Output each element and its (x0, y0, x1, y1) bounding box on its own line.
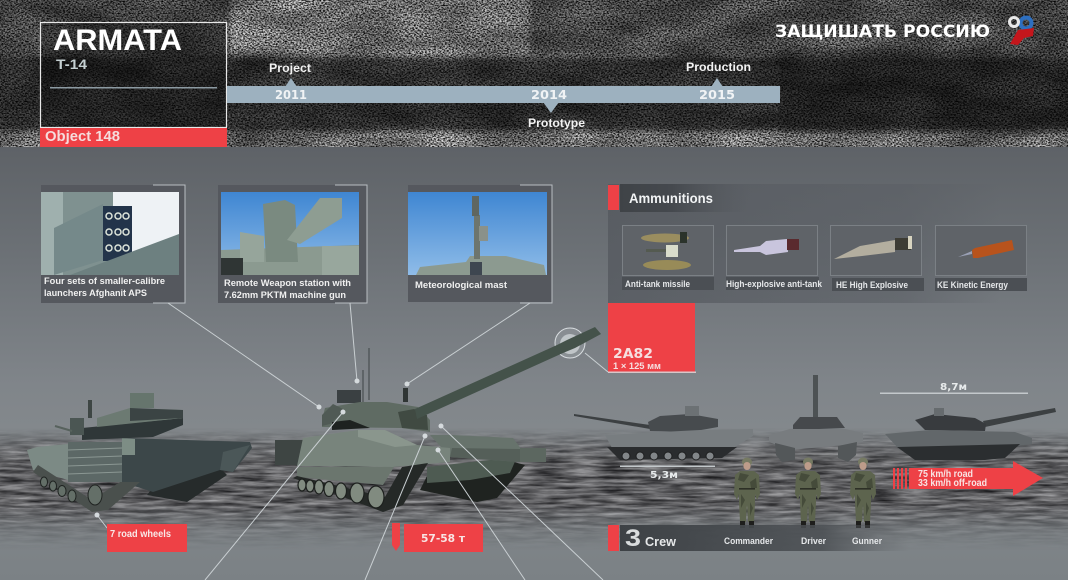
subtitle: T-14: T-14 (56, 56, 87, 72)
lower front hull (427, 457, 517, 483)
arrow: speed (893, 461, 1043, 496)
slat armour rear (275, 440, 303, 465)
heading (608, 184, 750, 212)
speed text (918, 469, 987, 489)
header textured band (0, 0, 1068, 147)
red label: weight (404, 524, 483, 552)
red label: 7 road wheels (107, 524, 187, 552)
panel: Meteorological mast (408, 185, 552, 303)
ammo: high-explosive anti-tank (726, 226, 823, 290)
gun barrel (415, 327, 601, 419)
milestone: Prototype 2014: 2014 (531, 87, 567, 102)
panel: Ammunitions (608, 184, 1027, 303)
red label: Object 148 (40, 128, 227, 147)
label: KE Kinetic Energy (937, 280, 1008, 290)
panel: Remote weapon station: 7.62mm PKTM machine gun (224, 290, 346, 301)
ammo: HE high explosive (830, 226, 924, 291)
caption: Meteorological mast (415, 280, 508, 291)
ammo: KE kinetic energy (935, 226, 1027, 291)
tank: left rear view (27, 393, 252, 512)
milestone: Project 2011 (269, 61, 311, 102)
label: Anti-tank missile (625, 279, 690, 289)
callout dots (94, 378, 444, 518)
RWS box (337, 390, 361, 403)
muzzle ring (555, 328, 585, 358)
tank: side view (574, 406, 753, 460)
dimension: width 5,3 m: 5,3м (650, 470, 678, 481)
panel: Afghanit APS: launchers Afghanit APS (44, 288, 147, 299)
crew role labels: Driver (801, 536, 826, 546)
rear block (520, 448, 546, 462)
photo: launchers (41, 192, 179, 275)
photo: mast (408, 192, 547, 275)
page background (0, 147, 1068, 580)
milestone: Project 2011: 2011 (275, 87, 307, 102)
crew bar: Crew (645, 534, 677, 549)
milestone: Prototype 2014: Prototype (528, 116, 585, 130)
milestone: Project 2011: Project (269, 61, 311, 75)
far side track (420, 461, 525, 502)
callout lines (97, 303, 608, 580)
crew role labels: Gunner (852, 536, 882, 546)
lower skirt (297, 467, 394, 485)
upper side skirt (297, 430, 450, 467)
crew role labels: Commander (724, 536, 773, 546)
weight arrow icon (392, 523, 400, 551)
timeline (227, 60, 780, 130)
milestone: Production 2015: Production (686, 60, 751, 74)
title: ARMATA: ARMATA (53, 24, 182, 57)
brand name: ЗАЩИШАТЬ РОССИЮ (775, 22, 990, 42)
front hull (27, 444, 68, 480)
speed text: 33 km/h off-road (918, 478, 987, 489)
turret (322, 402, 430, 432)
dimension: length 8,7 m: 8,7м (940, 382, 967, 393)
ground texture band (0, 428, 1068, 550)
milestone: Production 2015: 2015 (699, 87, 735, 102)
red label: 2A82 gun: 2А82 (613, 347, 653, 362)
label: High-explosive anti-tank (726, 279, 823, 289)
rear hull (122, 438, 252, 492)
milestone: Production 2015 (686, 60, 751, 102)
tank: main T-14 (275, 327, 601, 512)
caption: Four sets of smaller-calibre (44, 276, 165, 287)
antennas (363, 348, 369, 402)
ammo: anti-tank missile (622, 226, 714, 290)
red label: 2A82 gun (608, 303, 696, 373)
title box (40, 22, 227, 147)
crew figures (734, 458, 876, 528)
photo: weapon station (221, 192, 359, 275)
panel: Afghanit APS (41, 185, 185, 303)
milestone: Prototype 2014 (528, 87, 585, 130)
crew role labels (724, 536, 882, 546)
red label: 2A82 gun: 1 × 125 мм (613, 361, 661, 371)
crew bar (608, 525, 910, 552)
near track (33, 465, 140, 512)
red label: Object 148: Object 148 (45, 129, 120, 145)
mantlet (398, 409, 428, 430)
panel: Remote weapon station (218, 185, 367, 303)
heading: Ammunitions (629, 191, 713, 206)
crew bar: 3 (625, 525, 641, 552)
turret (82, 418, 183, 440)
speed text: 75 km/h road (918, 469, 973, 480)
icon: brand logo (1010, 18, 1034, 45)
slat armour (68, 442, 122, 482)
red label: 7 road wheels: 7 road wheels (110, 529, 171, 540)
dimension: width 5,3 m (620, 466, 715, 481)
right glacis plate (430, 435, 522, 462)
tank: front view (769, 375, 863, 462)
tank: opposite side view (885, 408, 1056, 460)
rear track (147, 468, 227, 502)
road wheels (298, 479, 384, 508)
red label: weight: 57-58 т (421, 532, 466, 545)
main track (293, 463, 428, 512)
caption: Remote Weapon station with (224, 278, 351, 289)
label: HE High Explosive (836, 280, 908, 290)
